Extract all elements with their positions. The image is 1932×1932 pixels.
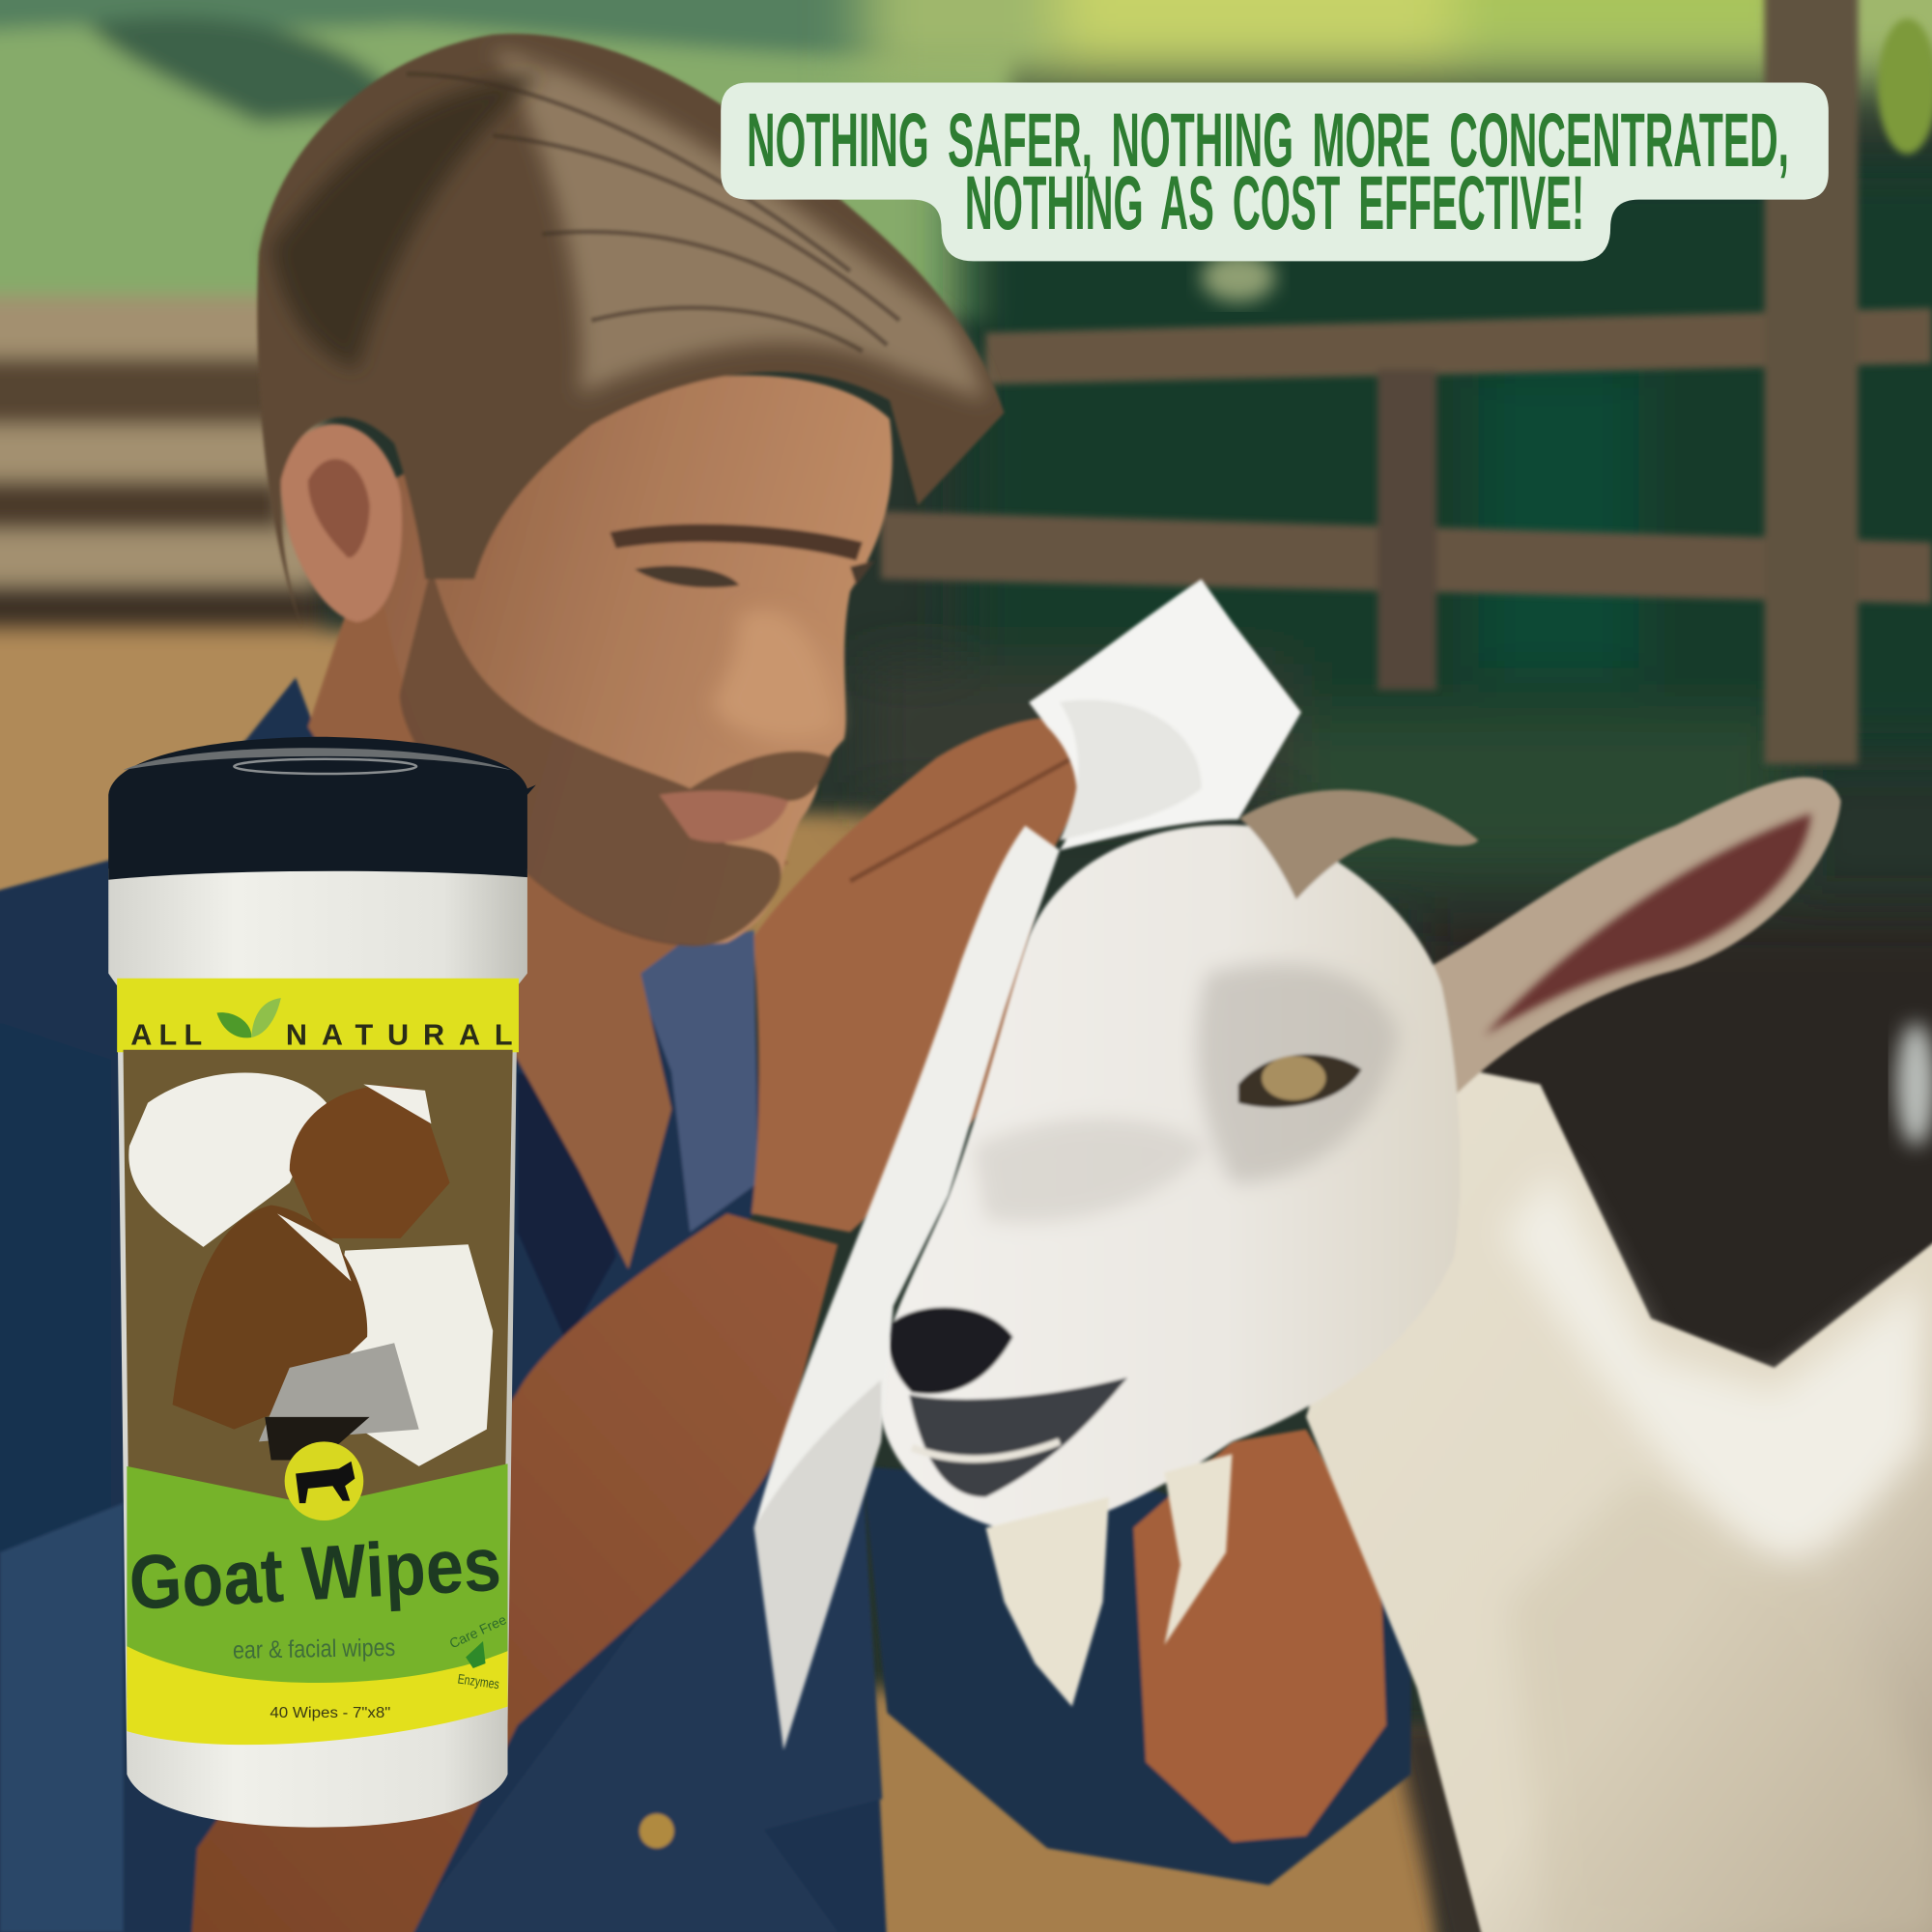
nose <box>889 1307 1012 1394</box>
ear <box>281 424 402 622</box>
product: Goat Wipes canister <box>108 737 536 1828</box>
nose and cheek highlight <box>712 610 838 740</box>
mouth <box>909 1378 1127 1497</box>
goat badge <box>285 1441 363 1520</box>
ear <box>1417 777 1841 1096</box>
leaf logo <box>216 998 281 1037</box>
forearm <box>191 1213 838 1932</box>
shirt <box>0 678 887 1932</box>
label photo <box>124 1050 513 1506</box>
eye <box>1238 1054 1361 1107</box>
wipe cloth <box>754 579 1301 1749</box>
product name: Goat Wipes <box>127 1520 503 1626</box>
enzyme logo <box>447 1611 509 1691</box>
eye and brow <box>610 524 863 560</box>
product: Goat Wipes canister: NATURAL <box>286 1019 513 1052</box>
man <box>0 34 1410 1932</box>
headline text <box>747 97 1789 245</box>
neck <box>308 542 788 1269</box>
face <box>370 376 893 945</box>
beard <box>985 1497 1109 1707</box>
far arm <box>1133 1430 1386 1842</box>
headline banner <box>721 82 1829 261</box>
yellow lower band <box>127 1646 508 1745</box>
sub text: ear & facial wipes <box>233 1634 396 1664</box>
green panel <box>127 1463 508 1698</box>
neck and body <box>1306 1060 1932 1932</box>
banner shape <box>721 82 1829 261</box>
head <box>877 825 1461 1530</box>
horn <box>1239 790 1479 899</box>
enzyme logo: Care Free <box>447 1611 509 1651</box>
enzyme logo: Enzymes <box>457 1670 500 1691</box>
hair <box>257 34 1005 629</box>
goat <box>877 777 1932 1932</box>
cap <box>108 737 536 880</box>
count text: 40 Wipes - 7"x8" <box>270 1705 390 1721</box>
far sleeve <box>863 1466 1410 1886</box>
beard <box>400 567 832 947</box>
canister bottom and body <box>108 868 527 1828</box>
band text: ALL <box>130 1019 202 1052</box>
yellow band <box>117 979 519 1052</box>
hand <box>752 717 1121 1233</box>
